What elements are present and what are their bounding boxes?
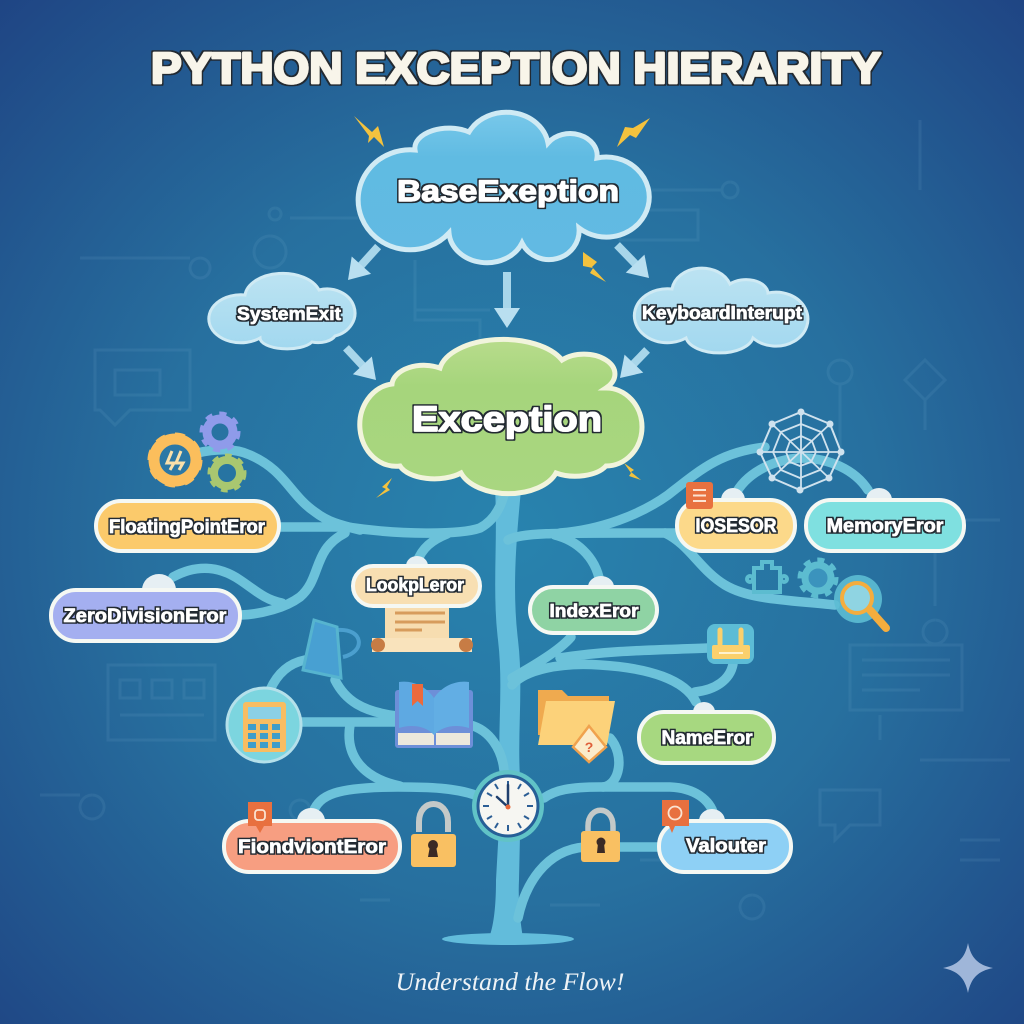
connector bump [588,576,614,587]
connector bump [297,808,325,821]
pill: FiondviontEror [224,802,400,872]
gear: orange [150,435,200,485]
connector bump [699,809,725,821]
arrow: BaseException to Exception [494,272,520,328]
label: LookpLeror: LookpLeror [366,575,464,595]
arrows [336,236,658,389]
scroll paper [385,600,449,640]
cloud: KeyboardInterrupt [634,268,808,353]
arrow: BaseException to SystemExit [338,238,388,289]
connector bump [142,574,176,590]
label: SystemExit: SystemExit [237,304,341,324]
title: PYTHON EXCEPTION HIERARITY [151,44,881,93]
footer tagline: Understand the Flow! [396,969,624,996]
icon: jug [303,620,359,678]
icon: open book [395,682,473,748]
gear: green [210,456,244,490]
icon: clock [472,770,544,842]
icon: sparkle star [943,943,993,993]
arrow: BaseException to KeyboardInterrupt [608,236,658,287]
icon: orange timer badge [662,800,689,833]
label: KeyboardInterrupt: KeyboardInterupt [642,303,802,323]
icon: spider web [756,408,844,494]
cloud: SystemExit [209,273,355,349]
pill: FloatingPointEror [96,501,279,551]
icon: puzzle piece [747,562,787,592]
scroll roller [372,638,472,652]
label: IndexEror: IndexEror [550,601,638,621]
tree of exception branches [173,447,868,945]
branches right [508,447,868,918]
icon: gears [150,414,244,490]
label: MemoryEror: MemoryEror [826,516,944,537]
trunk base [442,933,574,945]
label: ZeroDivisionEror: ZeroDivisionEror [64,606,227,627]
connector bump [693,702,715,712]
icon: scroll with LookpLeror [353,556,480,652]
cloud: Exception [360,339,642,494]
connector bump [406,556,428,566]
label: Exception: Exception [412,400,602,439]
icon: plug [707,624,754,664]
label: NameEror: NameEror [662,728,753,749]
pill: IOSESOR [677,482,795,551]
icon: folder with question mark [538,690,615,762]
connector bump [721,488,745,500]
icon: orange tag badge [248,802,272,833]
cloud: BaseException [358,112,649,263]
label: BaseException: BaseExeption [397,175,619,208]
icon: orange note badge [686,482,713,509]
gear: purple [202,414,238,450]
icon: left padlock [411,804,456,867]
pill: NameEror [639,702,774,763]
label: IOSESOR: IOSESOR [696,516,777,537]
icon: right padlock [581,810,620,862]
label: FiondviontEror: FiondviontEror [238,837,387,858]
lightning bolts [354,116,650,498]
pill: ZeroDivisionEror [51,574,240,641]
pill: Valouter [659,800,791,872]
icon: calculator [227,688,301,762]
icon: magnifier [834,575,886,628]
pill: IndexEror [530,576,657,633]
connector bump [866,488,892,500]
arrow: SystemExit to Exception [336,339,386,389]
scroll text lines [395,604,445,630]
label: Valouter: Valouter [686,836,767,857]
label: FloatingPointEror: FloatingPointEror [109,517,266,538]
icon: settings gear [800,560,836,596]
pill: MemoryEror [806,488,964,551]
branches left [173,450,505,812]
warning diamond: ? [585,739,593,755]
trunk [489,480,523,938]
arrow: KeyboardInterrupt to Exception [611,341,656,387]
